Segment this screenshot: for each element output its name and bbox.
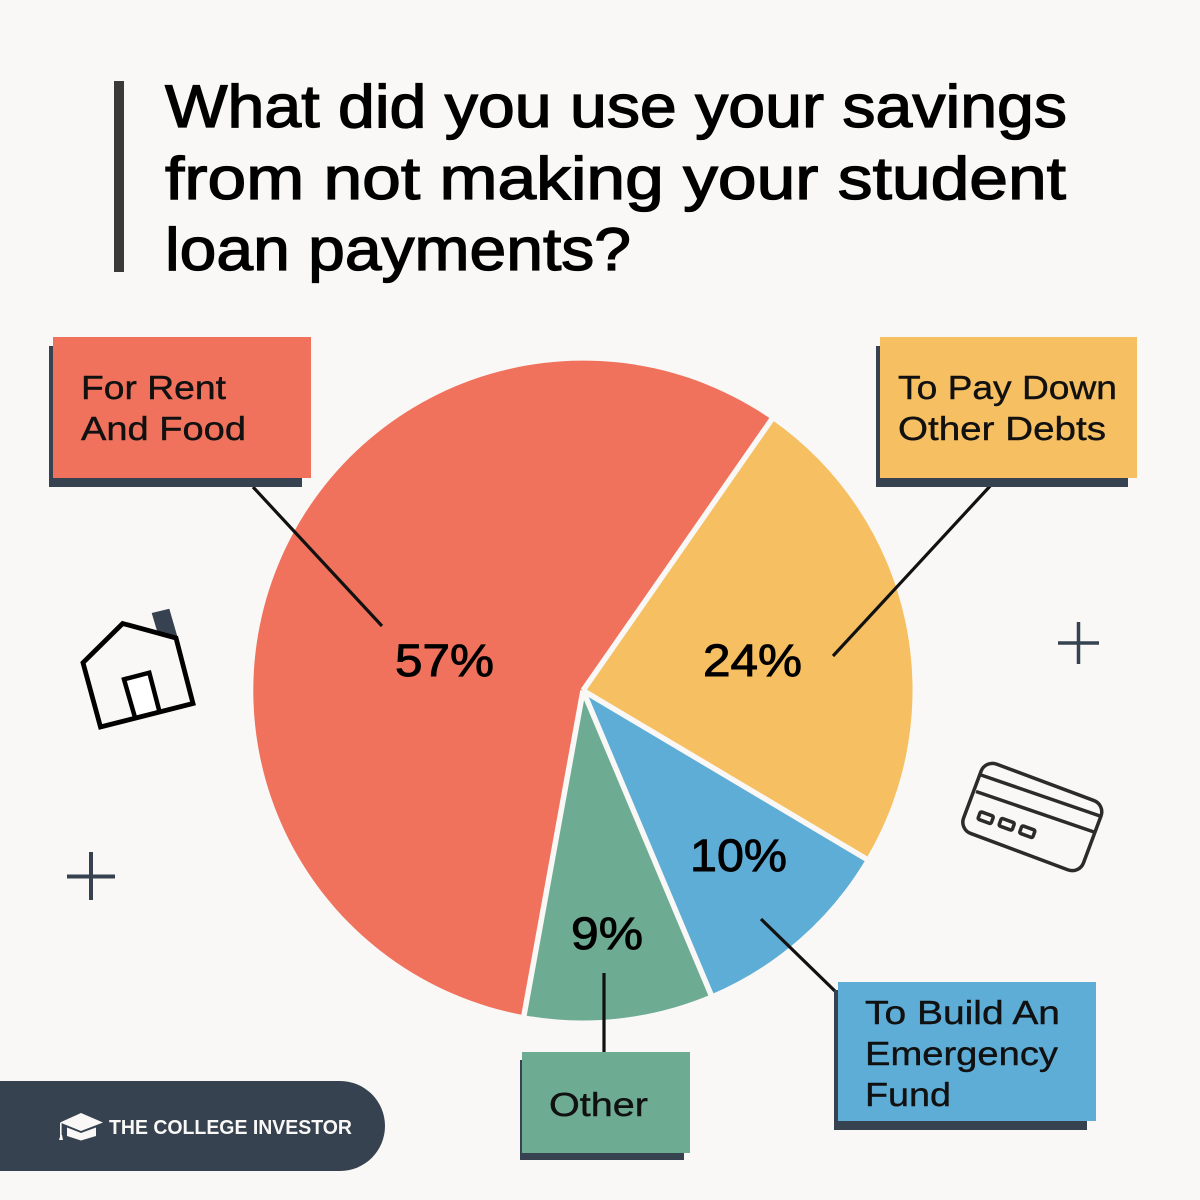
- leader line: other: [602, 973, 606, 1053]
- callout: for rent and food: For Rent: [81, 369, 226, 406]
- pie chart: [253, 361, 913, 1020]
- logo text: THE COLLEGE INVESTOR: [109, 1116, 352, 1139]
- callout: to pay down other debts: Other Debts: [898, 410, 1106, 447]
- percentage labels: 9%: [571, 908, 643, 959]
- leader line: emergency fund: [761, 919, 838, 994]
- title accent bar: [114, 81, 124, 272]
- icon: plus right: [1058, 622, 1099, 664]
- percentage labels: [395, 635, 802, 959]
- percentage labels: 57%: [395, 635, 494, 686]
- callout: to build an emergency fund: [834, 982, 1096, 1130]
- percentage labels: 10%: [690, 830, 787, 881]
- slice: for rent and food 57%: [253, 361, 772, 1015]
- title: What did you use your savings: [165, 73, 1067, 140]
- leader line: rent and food: [253, 487, 382, 626]
- percentage labels: 24%: [703, 635, 802, 686]
- callout: to build an emergency fund: Emergency: [865, 1035, 1059, 1072]
- callout: for rent and food: [49, 337, 311, 487]
- slice: pay down other debts 24%: [583, 420, 913, 859]
- icon: plus left: [67, 852, 115, 900]
- callout: to build an emergency fund: To Build An: [865, 994, 1060, 1031]
- callout: to build an emergency fund: Fund: [865, 1076, 951, 1113]
- footer logo pill: [0, 1081, 385, 1171]
- title: loan payments?: [165, 216, 631, 283]
- icon: graduation cap: [59, 1113, 103, 1140]
- callout: other: Other: [549, 1086, 648, 1123]
- leader line: other debts: [833, 484, 992, 656]
- slice: other 9%: [524, 690, 711, 1020]
- callout: to pay down other debts: To Pay Down: [898, 369, 1117, 406]
- callout: for rent and food: And Food: [81, 410, 246, 447]
- icon: house: [83, 609, 193, 727]
- slice: emergency fund 10%: [583, 690, 866, 994]
- icon: credit card: [959, 760, 1105, 874]
- callout: to pay down other debts: [876, 337, 1137, 487]
- title: [165, 73, 1067, 283]
- title: from not making your student: [165, 145, 1066, 212]
- callout: other: [520, 1052, 690, 1160]
